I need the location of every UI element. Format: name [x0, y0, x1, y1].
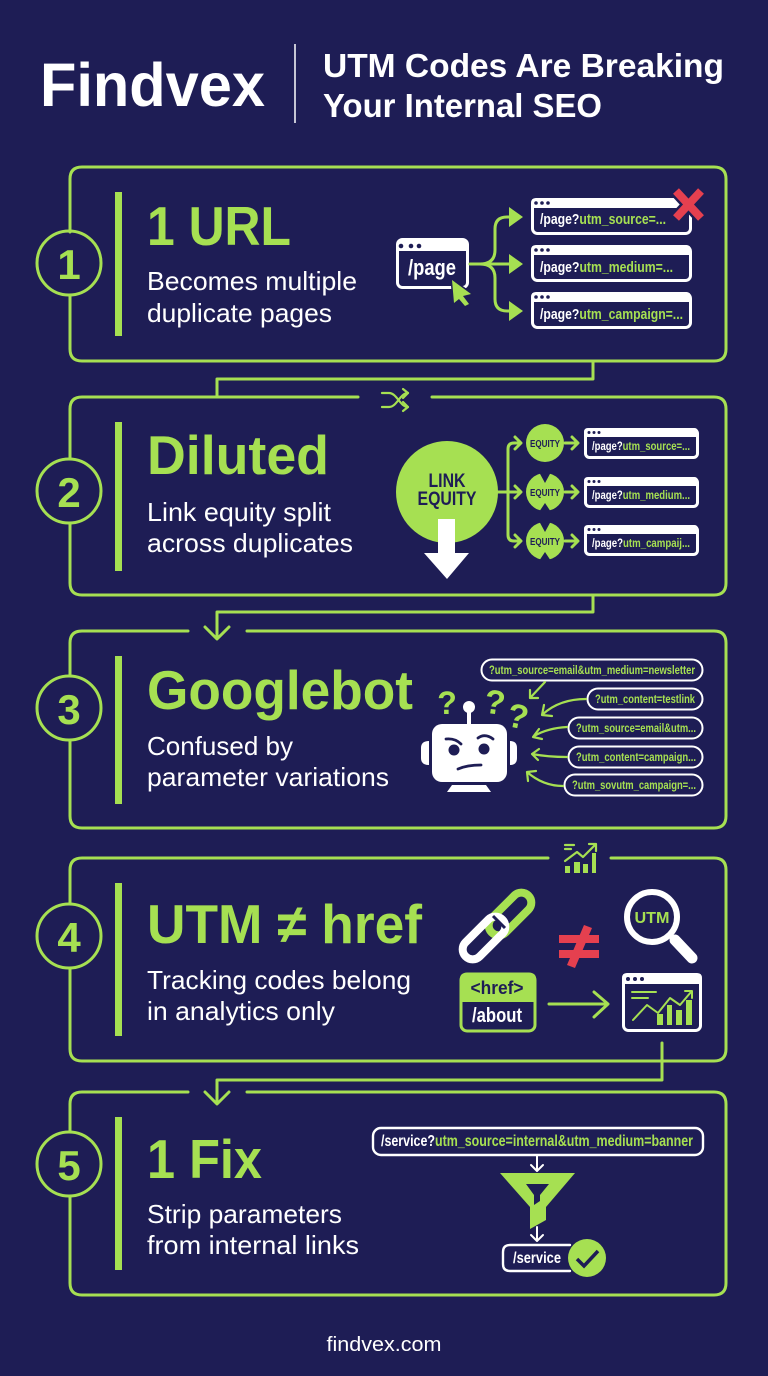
- not equal sign: [559, 925, 599, 968]
- title: Your Internal SEO: [323, 87, 602, 124]
- heading: UTM ≠ href: [147, 893, 423, 955]
- panel: step 2: [37, 389, 726, 595]
- description: [147, 965, 411, 1026]
- url window: medium: /page?utm_medium...: [592, 488, 690, 502]
- panel: step 1: [37, 167, 726, 361]
- url window: campaign: [584, 525, 698, 554]
- href box: /about: [472, 1005, 522, 1027]
- parameter pills: [482, 660, 702, 796]
- brand name: Findvex: [40, 51, 265, 119]
- diagram: confused robot: [421, 660, 702, 796]
- description: Link equity split: [147, 497, 332, 527]
- panel: step 3: [37, 631, 726, 828]
- clean url: [503, 1245, 570, 1271]
- node arrows: [565, 437, 578, 547]
- panel: step 4: [37, 844, 726, 1061]
- link equity circle: EQUITY: [418, 489, 477, 510]
- number badge 2: [37, 459, 101, 523]
- parameter pills: ?utm_content=campaign...: [576, 752, 696, 764]
- branch lines: [498, 437, 521, 547]
- heading: Googlebot: [147, 659, 413, 721]
- url window: campaign: /page?utm_campaign=...: [540, 306, 683, 323]
- branch arrows: [470, 207, 523, 321]
- icon: growth chart: [565, 844, 596, 873]
- href box: <href>: [470, 978, 524, 998]
- diagram: link equity split: [396, 424, 698, 579]
- url window: medium: [531, 245, 691, 280]
- diagram: href vs utm: [459, 889, 702, 1031]
- equity node: split: [526, 521, 564, 561]
- url window: source: /page?utm_source=...: [540, 211, 666, 228]
- connector: step 2 to 3: [205, 595, 593, 639]
- analytics window: [622, 973, 702, 1030]
- url window: medium: [584, 477, 698, 506]
- description: across duplicates: [147, 528, 353, 558]
- source page window: /page: [408, 255, 456, 280]
- parameter pills: ?utm_source=email&utm...: [576, 723, 696, 735]
- equity node: whole: [526, 424, 564, 462]
- description: Tracking codes belong: [147, 965, 411, 995]
- icon: check: [568, 1239, 606, 1277]
- question marks: [437, 683, 532, 738]
- title: UTM Codes Are Breaking: [323, 47, 724, 84]
- arrow: [531, 1156, 543, 1171]
- connector: step 4 to 5: [205, 1043, 662, 1104]
- equity node: whole: EQUITY: [530, 438, 560, 450]
- number badge 5: [37, 1132, 101, 1196]
- diagram: url branches: [397, 191, 701, 328]
- icon: chain link: [459, 889, 535, 963]
- down arrow: [424, 519, 469, 579]
- number badge 4: 4: [57, 914, 81, 961]
- number badge 4: [37, 904, 101, 968]
- url window: medium: /page?utm_medium=...: [540, 259, 673, 276]
- heading: Diluted: [147, 424, 329, 486]
- header: [40, 44, 724, 124]
- link equity circle: [396, 441, 498, 543]
- description: from internal links: [147, 1230, 359, 1260]
- url window: source: [584, 428, 698, 458]
- equity node: split: EQUITY: [530, 487, 560, 499]
- url window: campaign: /page?utm_campaij...: [592, 536, 690, 550]
- description: parameter variations: [147, 762, 389, 792]
- heading: 1 URL: [147, 195, 291, 257]
- number badge 5: 5: [57, 1142, 81, 1189]
- description: in analytics only: [147, 996, 335, 1026]
- parameter pills: ?utm_source=email&utm_medium=newsletter: [489, 665, 695, 677]
- question marks: ?: [504, 696, 532, 738]
- arrow: [549, 992, 608, 1017]
- source page window: [397, 239, 468, 288]
- equity node: split: EQUITY: [530, 536, 560, 548]
- long url pill: [373, 1128, 703, 1155]
- question marks: ?: [437, 685, 457, 721]
- icon: funnel: [500, 1173, 575, 1229]
- link equity circle: LINK: [428, 471, 466, 492]
- number badge 1: [37, 231, 101, 295]
- description: Confused by: [147, 731, 293, 761]
- parameter pills: ?utm_sovutm_campaign=...: [572, 780, 696, 792]
- number badge 2: 2: [57, 469, 81, 516]
- url window: source: [531, 198, 691, 234]
- panel: step 5: [37, 1092, 726, 1295]
- url window: source: /page?utm_source=...: [592, 439, 690, 453]
- cursor: [452, 280, 471, 306]
- href box: [460, 973, 536, 1031]
- equity node: split: [526, 472, 564, 512]
- icon: magnifier: UTM: [634, 910, 670, 927]
- clean url: /service: [513, 1250, 561, 1267]
- arrow: [531, 1227, 543, 1241]
- description: Becomes multiple: [147, 266, 357, 296]
- red x: [676, 191, 701, 218]
- title: [323, 47, 724, 124]
- connector: step 1 to 2: [217, 361, 593, 397]
- heading: 1 Fix: [147, 1128, 262, 1190]
- long url pill: /service?utm_source=internal&utm_medium=banner: [381, 1133, 693, 1150]
- description: [147, 266, 357, 328]
- url window: campaign: [531, 292, 691, 328]
- confusion arrows: [527, 682, 586, 786]
- diagram: filter: [373, 1128, 703, 1277]
- description: [147, 731, 389, 792]
- icon: magnifier: [627, 892, 692, 958]
- parameter pills: ?utm_content=testlink: [595, 694, 695, 706]
- icon: shuffle: [382, 389, 408, 411]
- footer: findvex.com: [326, 1334, 442, 1356]
- description: [147, 497, 353, 558]
- number badge 1: 1: [57, 241, 81, 288]
- description: [147, 1199, 359, 1260]
- description: Strip parameters: [147, 1199, 342, 1229]
- number badge 3: 3: [57, 686, 81, 733]
- description: duplicate pages: [147, 298, 332, 328]
- icon: robot: [421, 701, 517, 792]
- question marks: ?: [482, 683, 508, 723]
- number badge 3: [37, 676, 101, 740]
